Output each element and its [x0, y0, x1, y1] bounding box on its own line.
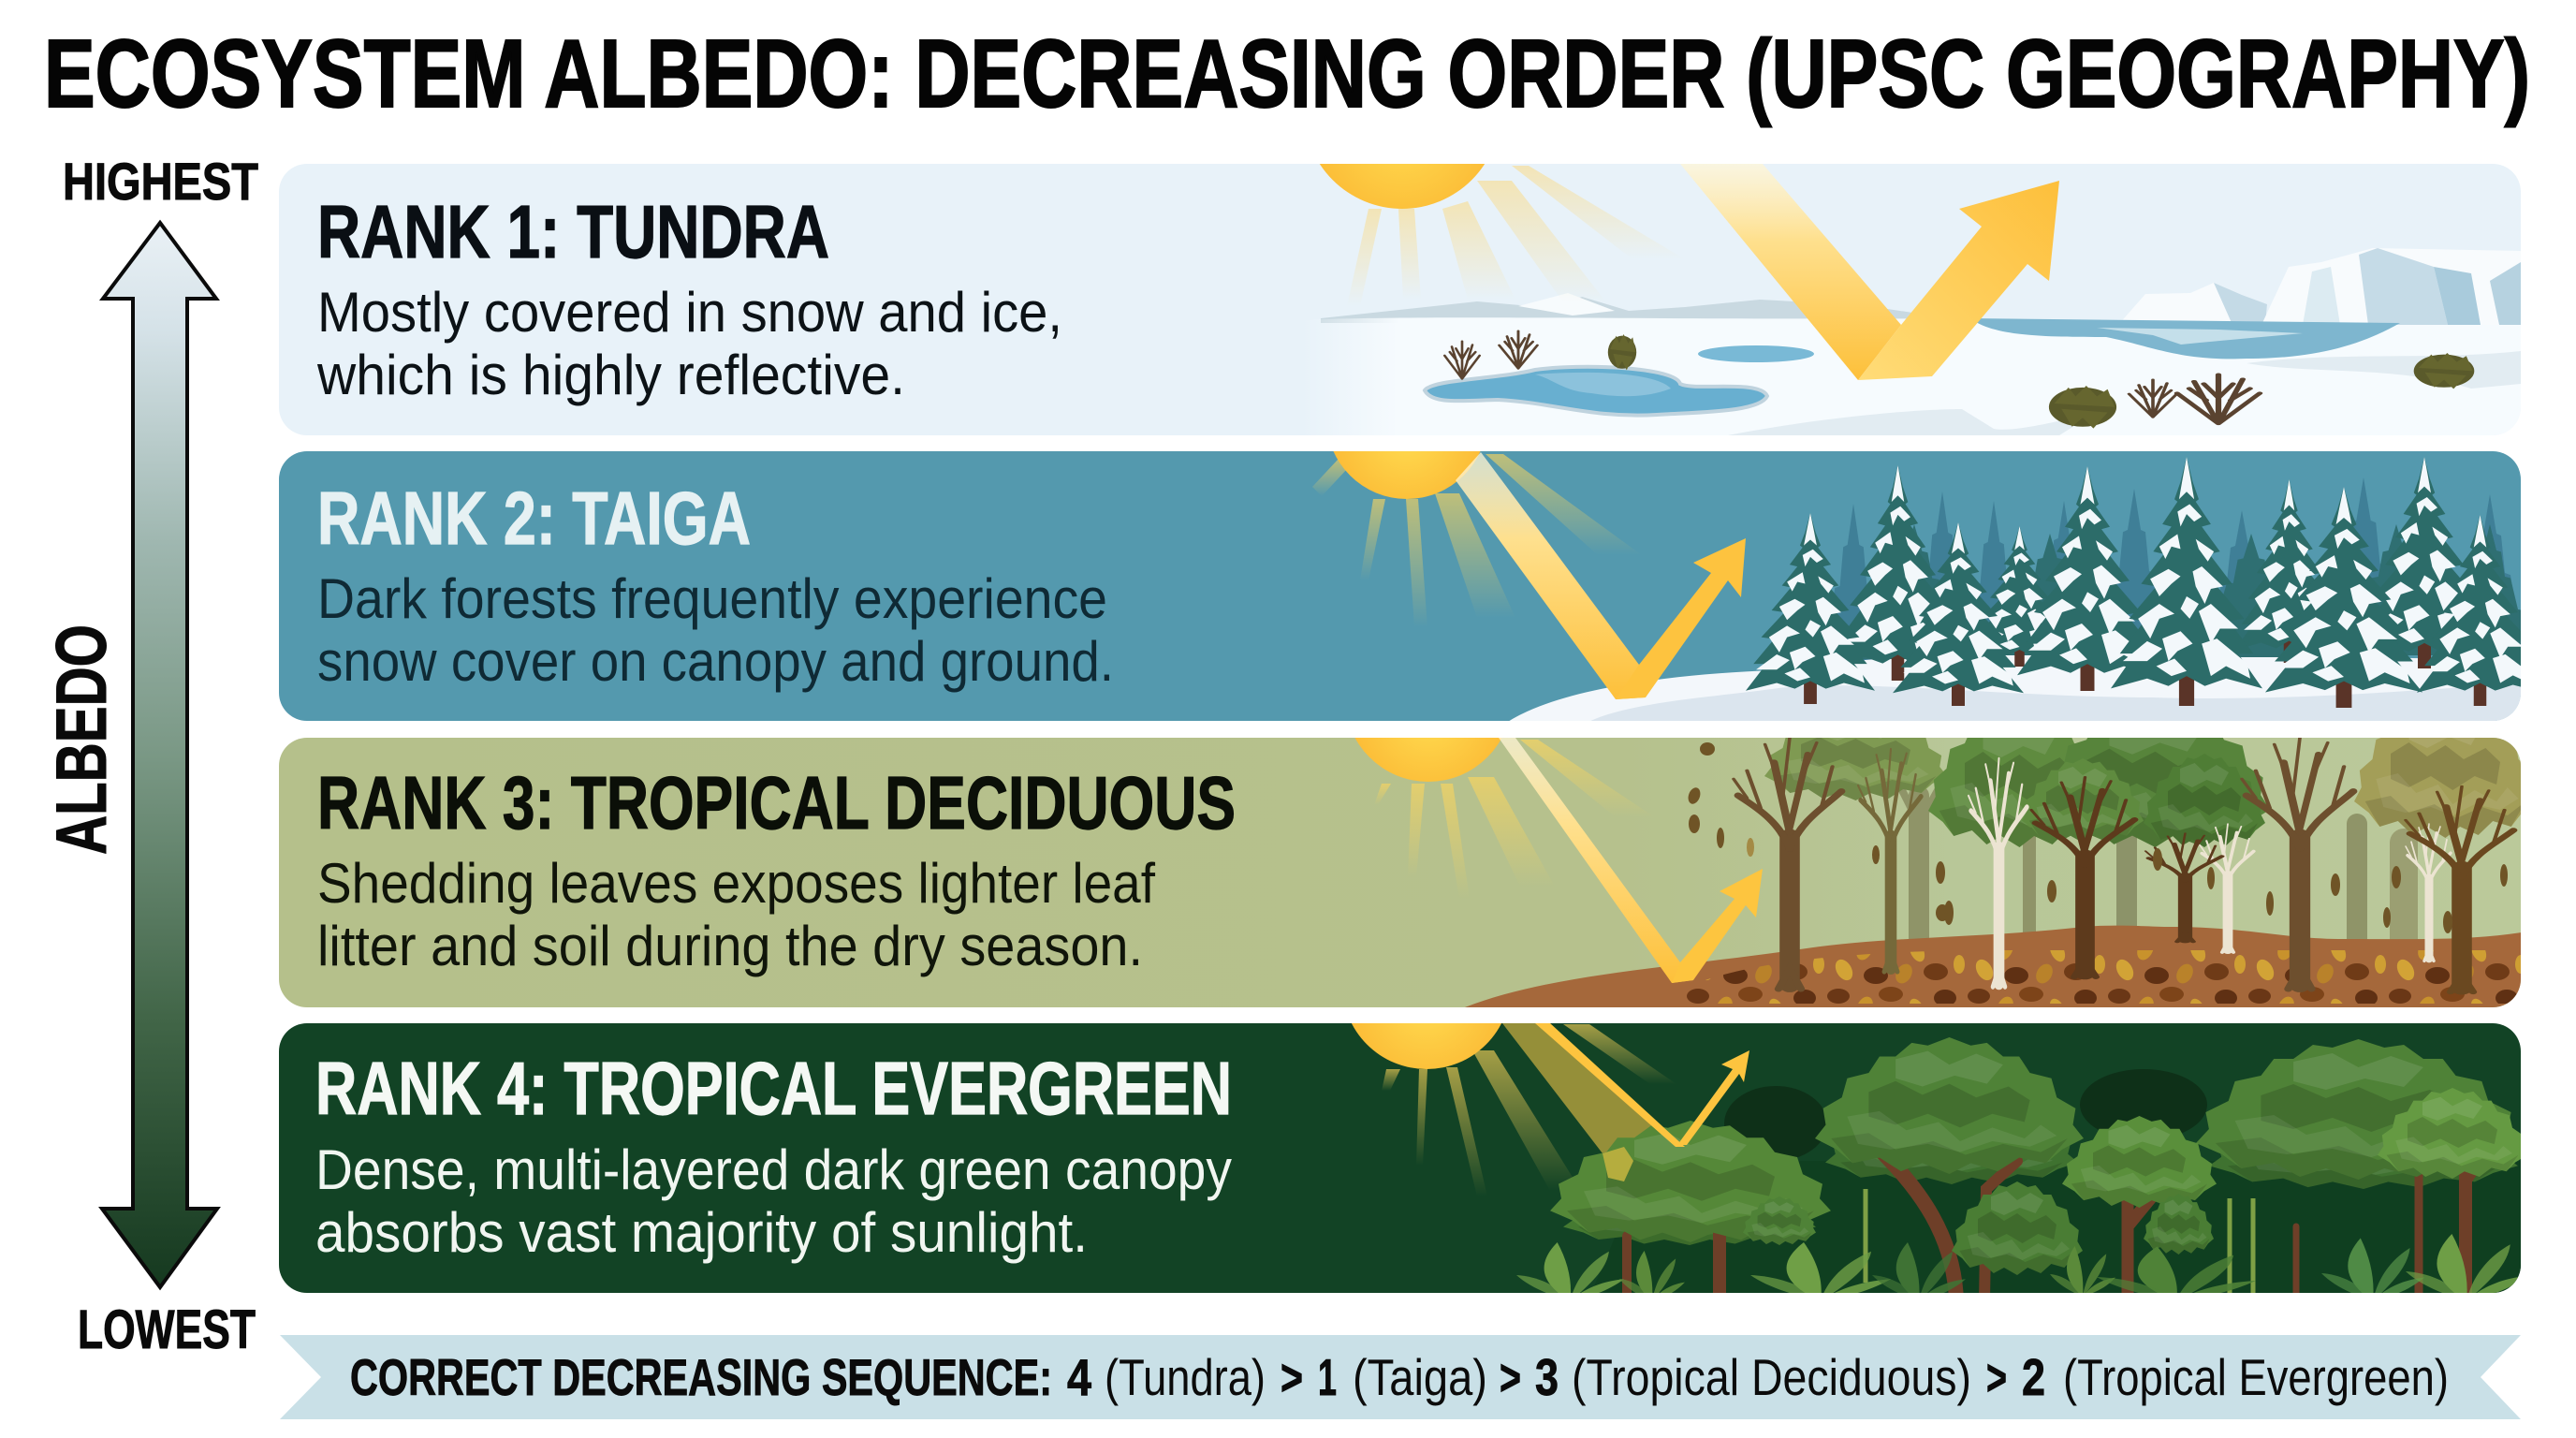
rays — [1350, 166, 1664, 294]
sun — [1333, 451, 1481, 499]
sun — [1320, 164, 1485, 209]
snow ground — [1301, 317, 2521, 435]
reflected arrow — [1858, 181, 2059, 380]
sequence text: (Taiga) — [1353, 1348, 1487, 1406]
trunks — [1627, 1123, 2495, 1301]
snow ground shadow — [1591, 685, 2521, 721]
sequence text: 3 — [1535, 1348, 1559, 1406]
body text: which is highly reflective. — [316, 344, 905, 406]
body text — [317, 852, 1155, 977]
sequence text: (Tundra) — [1105, 1348, 1266, 1406]
distant hills — [1321, 297, 1975, 323]
body text: snow cover on canopy and ground. — [317, 630, 1114, 693]
reflected arrow — [1616, 538, 1746, 699]
sequence text: > — [1986, 1348, 2007, 1406]
panel background — [279, 164, 2521, 435]
canopy mass behind — [1563, 1100, 2518, 1245]
arrow: double-headed albedo gradient — [102, 223, 217, 1287]
icon: dead shrubs and bushes — [1444, 331, 2474, 429]
incoming beam edge — [1535, 1023, 1685, 1147]
label: lowest: LOWEST — [78, 1299, 256, 1360]
body text: absorbs vast majority of sunlight. — [315, 1201, 1088, 1264]
heading: RANK 2: TAIGA — [317, 477, 751, 560]
rays — [1376, 740, 1632, 877]
sequence text: 4 — [1067, 1348, 1091, 1406]
panel background — [279, 738, 2521, 1007]
falling leaves — [1686, 742, 2508, 933]
sequence text: CORRECT DECREASING SEQUENCE: — [350, 1348, 1052, 1406]
reflected arrow — [1677, 1050, 1749, 1145]
taiga illustration — [1312, 338, 2543, 726]
pool small — [1698, 345, 1814, 362]
incoming beam — [1456, 452, 1646, 699]
body text: Shedding leaves exposes lighter leaf — [317, 852, 1155, 915]
incoming beam — [1499, 738, 1693, 983]
heading: RANK 4: TROPICAL EVERGREEN — [315, 1047, 1232, 1130]
panel: rank 2 taiga — [279, 451, 2521, 721]
mid-layer dark trees — [1860, 524, 2535, 659]
incoming beam — [1680, 164, 1901, 380]
sequence text — [350, 1348, 2449, 1406]
panel background — [279, 451, 2521, 721]
icebergs — [2118, 248, 2521, 325]
sequence text: 1 — [1318, 1348, 1337, 1406]
body text: Mostly covered in snow and ice, — [317, 281, 1062, 344]
deciduous illustration — [1355, 738, 2521, 1007]
body text — [316, 281, 1062, 406]
panel: rank 3 tropical deciduous — [279, 738, 2521, 1007]
understory — [1591, 1161, 2521, 1293]
frozen lake — [1970, 318, 2400, 359]
body text: Dense, multi-layered dark green canopy — [315, 1138, 1232, 1201]
lianas and undergrowth — [1516, 1189, 2527, 1301]
sun — [1342, 901, 1511, 1069]
ribbon: correct decreasing sequence — [280, 1335, 2521, 1419]
heading: RANK 3: TROPICAL DECIDUOUS — [317, 761, 1236, 844]
canopies — [1764, 697, 2537, 847]
sequence text: 2 — [2022, 1348, 2045, 1406]
panel: rank 1 tundra — [279, 164, 2521, 435]
body text — [315, 1138, 1232, 1264]
leaf litter — [1676, 950, 2527, 1004]
sequence text: > — [1281, 1348, 1303, 1406]
body text: litter and soil during the dry season. — [317, 915, 1143, 977]
label: highest: HIGHEST — [63, 152, 258, 211]
pool large — [1425, 367, 1767, 416]
background trunks — [1898, 788, 2418, 940]
rays — [1312, 454, 1642, 627]
rays — [1382, 1024, 1676, 1196]
tundra illustration — [1320, 164, 2521, 435]
sequence text: (Tropical Deciduous) — [1572, 1348, 1971, 1406]
reflected arrow — [1672, 869, 1763, 983]
pool inner shading — [1535, 373, 1671, 396]
dark back canopy — [1724, 1069, 2207, 1161]
heading: RANK 1: TUNDRA — [317, 190, 829, 273]
panel background — [279, 1023, 2521, 1293]
ice floes — [2097, 328, 2303, 345]
lit patch on canopy — [1603, 1147, 1633, 1181]
broad beam — [1502, 1023, 1680, 1153]
sequence text: > — [1500, 1348, 1521, 1406]
albedo axis — [42, 152, 258, 1360]
spruce trees — [1746, 457, 2543, 708]
ground — [1456, 926, 2527, 1011]
label: albedo: ALBEDO — [42, 624, 122, 855]
body text: Dark forests frequently experience — [317, 567, 1107, 630]
background trees — [1835, 478, 2512, 660]
panel: rank 4 tropical evergreen — [279, 901, 2527, 1301]
sequence text: (Tropical Evergreen) — [2063, 1348, 2449, 1406]
white and bare tree trunks — [1734, 738, 2513, 992]
snow peak — [1518, 293, 1615, 315]
snow ground — [1509, 655, 2521, 721]
canopies — [1550, 1037, 2527, 1275]
snow foreground shadow — [1728, 351, 2521, 435]
body text — [317, 567, 1114, 693]
evergreen illustration — [1342, 901, 2527, 1301]
ribbon shape — [280, 1335, 2521, 1419]
sun — [1355, 738, 1501, 782]
